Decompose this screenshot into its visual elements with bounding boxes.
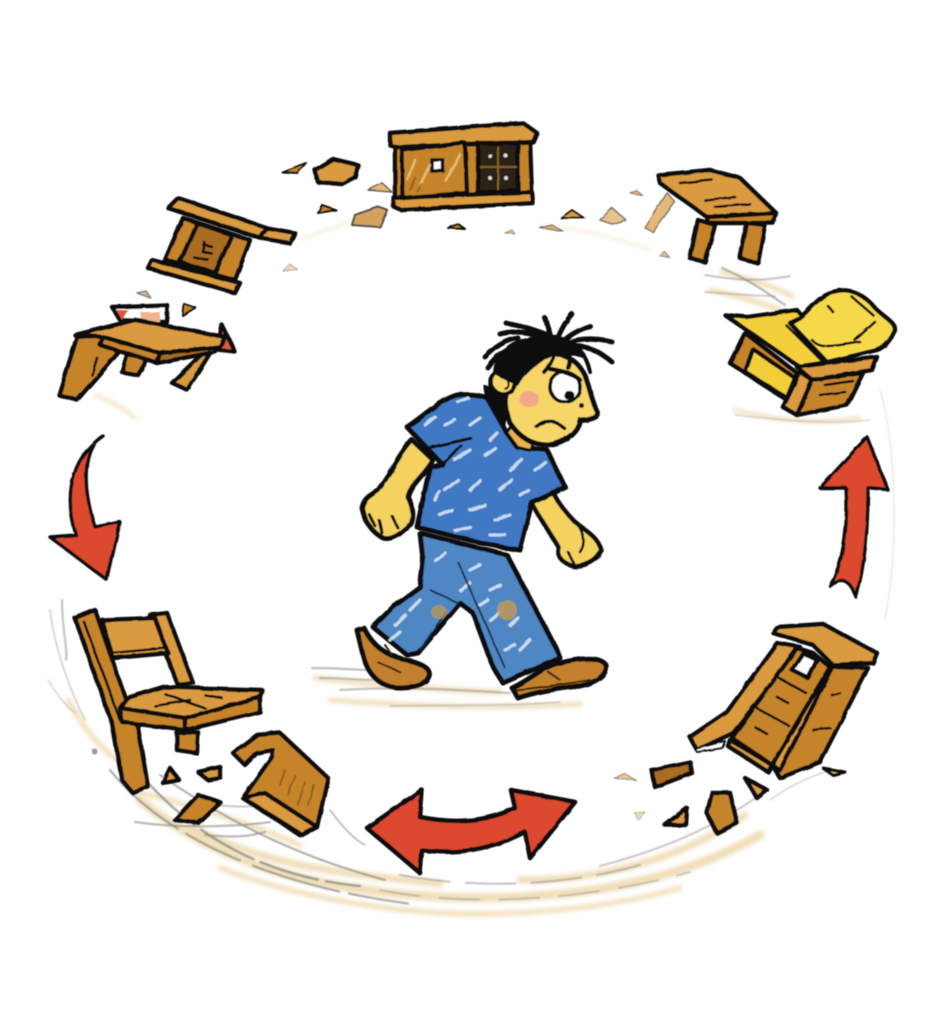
man: front shoe (512, 659, 606, 698)
furniture: tilted wooden stool at upper left (148, 198, 295, 293)
debris near collapsing cabinet (614, 762, 767, 833)
man: back arm (362, 440, 433, 539)
furniture: yellow armchair at right (725, 291, 895, 415)
man: back hair (484, 385, 510, 428)
man: head (491, 353, 598, 445)
man: spiky hair (485, 314, 612, 385)
furniture: wooden cabinet at top (390, 123, 537, 210)
furniture: broken wooden chair at lower left (75, 610, 262, 793)
furniture: collapsing cabinet at lower right (690, 624, 877, 778)
debris near chair (91, 748, 220, 823)
man: jeans (373, 533, 560, 683)
floor swirl: sketched motion strokes around the circle (48, 213, 894, 914)
arrow: red up arrow at right (820, 437, 888, 597)
broken chair fragment (233, 733, 328, 835)
arrow: red down arrow at left (50, 436, 120, 580)
furniture: table missing a leg at upper right (645, 170, 776, 263)
man: front arm (532, 493, 601, 566)
debris near top cabinet (137, 159, 670, 316)
man: neck (507, 420, 535, 450)
character: sad man walking (357, 314, 612, 698)
furniture: broken desk at left (59, 305, 235, 400)
arrow: red double-headed arrow at bottom (367, 790, 575, 873)
man: shirt (407, 395, 565, 550)
man: back shoe (357, 628, 430, 688)
